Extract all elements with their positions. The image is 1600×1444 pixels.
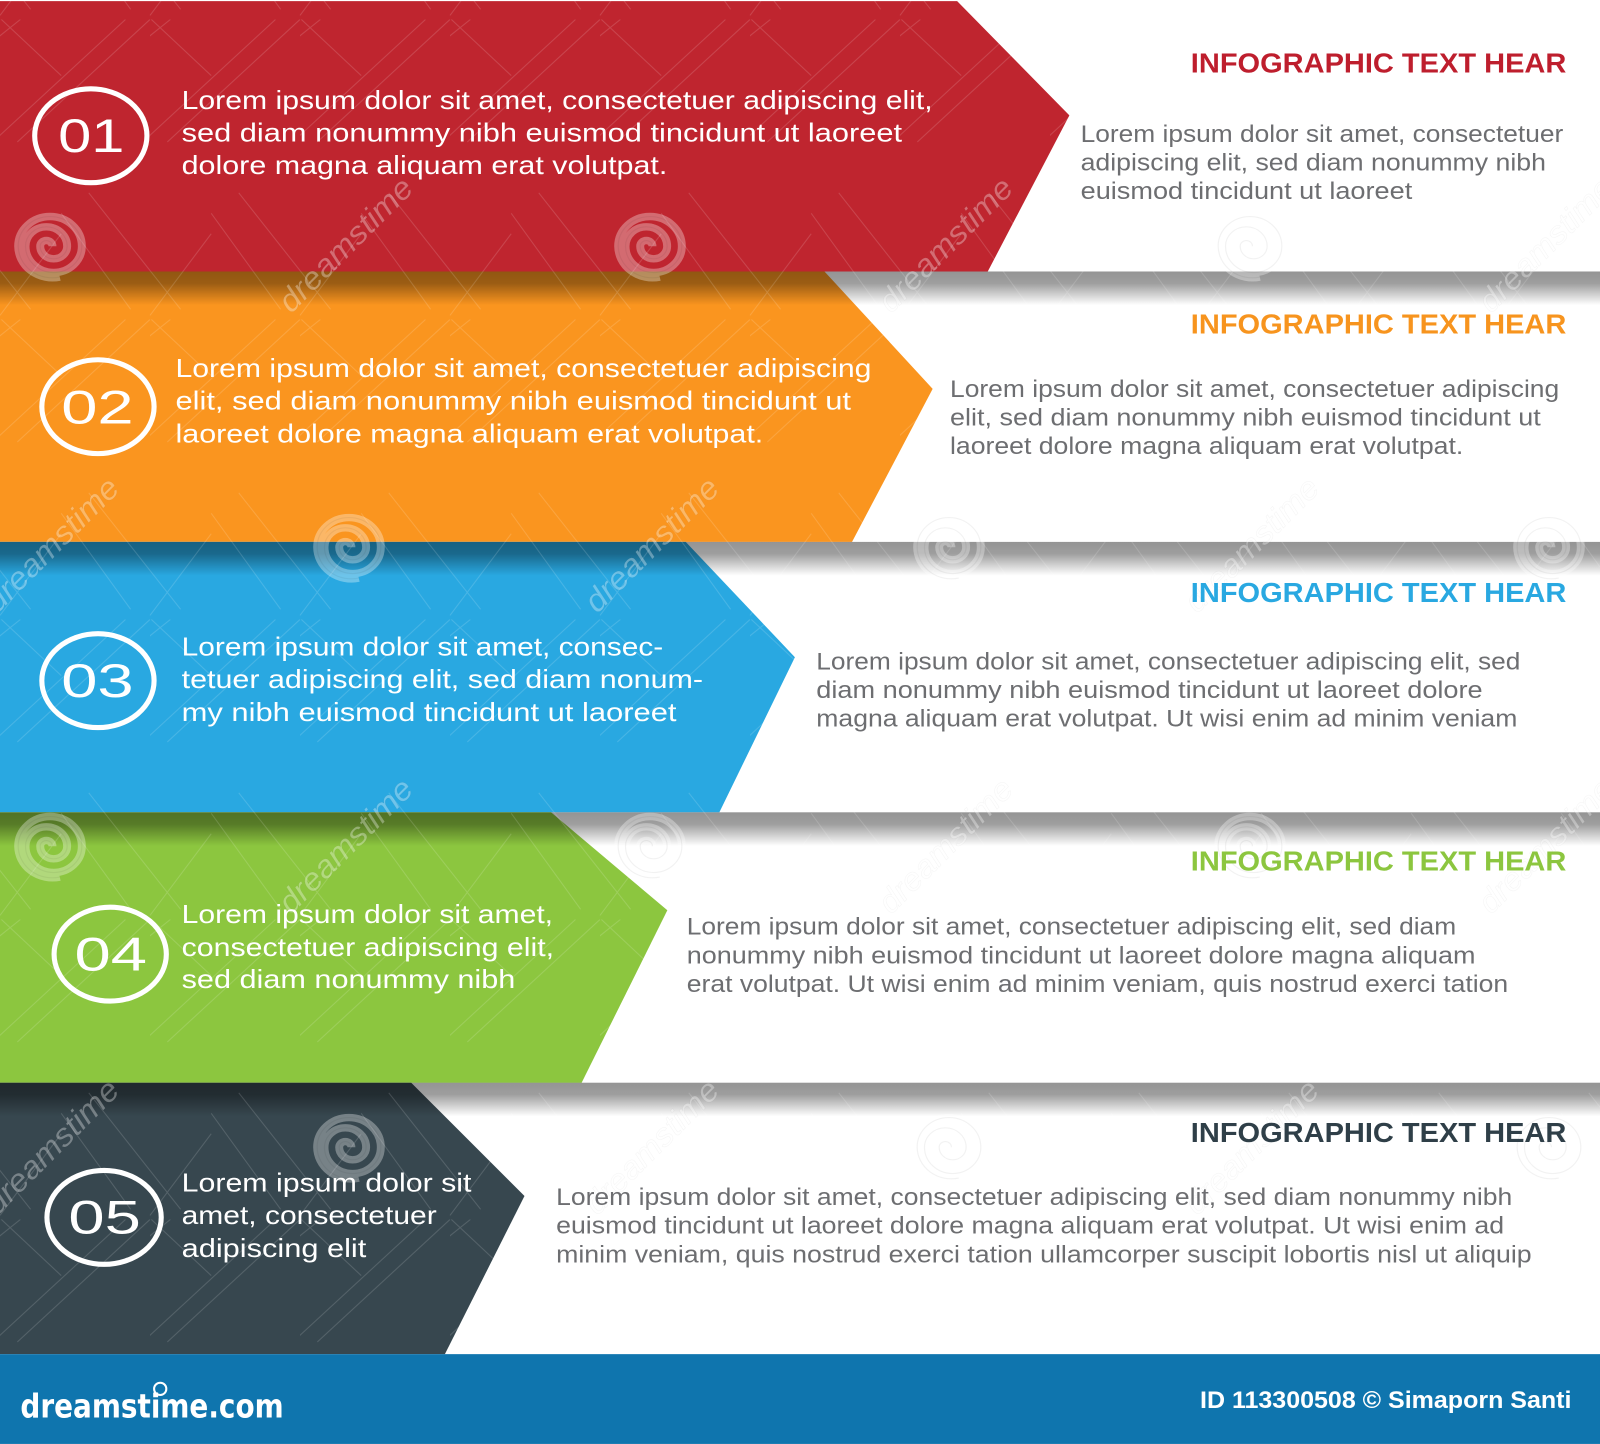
step 04 text: consectetuer adipiscing elit,: [182, 934, 554, 962]
step 05 badge: 05: [68, 1192, 141, 1244]
step 05 heading: INFOGRAPHIC TEXT HEAR: [1191, 1117, 1566, 1148]
step 01 badge: [35, 89, 147, 183]
step 02 badge: 02: [61, 382, 134, 434]
watermark: diagonal text: dreamstime: [1177, 1072, 1326, 1221]
step 04 description: Lorem ipsum dolor sit amet, consectetuer adipiscing elit, sed diam: [687, 914, 1456, 941]
step 04 description: nonummy nibh euismod tincidunt ut laoreet dolore magna aliquam: [687, 942, 1476, 969]
step 02 text: Lorem ipsum dolor sit amet, consectetuer adipiscing: [176, 355, 871, 383]
step 05 text: amet, consectetuer: [182, 1202, 437, 1230]
step 03 description: [816, 648, 1520, 733]
step 02 text: [176, 355, 871, 448]
watermark: diagonal text: dreamstime: [271, 170, 420, 319]
band shadows: [0, 271, 1600, 1116]
step 02 heading: INFOGRAPHIC TEXT HEAR: [1191, 309, 1566, 340]
step 04 heading: INFOGRAPHIC TEXT HEAR: [1191, 845, 1566, 876]
watermark: diagonal text: dreamstime: [577, 1072, 726, 1221]
watermark: diagonal text: dreamstime: [1177, 470, 1326, 619]
step 04 text: sed diam nonummy nibh: [182, 966, 515, 994]
step 05 description: Lorem ipsum dolor sit amet, consectetuer adipiscing elit, sed diam nonummy nibh: [556, 1184, 1512, 1211]
step 05 text: [182, 1169, 471, 1263]
step 03 description: diam nonummy nibh euismod tincidunt ut laoreet dolore: [816, 677, 1483, 704]
step 02 badge: [42, 360, 154, 454]
step 05 description: euismod tincidunt ut laoreet dolore magna aliquam erat volutpat. Ut wisi enim ad: [556, 1213, 1504, 1240]
footer bar: [0, 1354, 1600, 1444]
step 04 text: Lorem ipsum dolor sit amet,: [182, 901, 553, 929]
step 01 text: dolore magna aliquam erat volutpat.: [182, 152, 667, 180]
watermark: diagonal text: [0, 170, 1600, 1221]
step 04 badge: 04: [74, 928, 147, 980]
step 01 description: euismod tincidunt ut laoreet: [1081, 178, 1412, 205]
step 01 badge: 01: [58, 110, 124, 162]
step 04 badge: [54, 907, 166, 1001]
step 05 badge: [47, 1170, 161, 1264]
watermark: diagonal text: dreamstime: [271, 771, 420, 920]
footer credit: ID 113300508 © Simaporn Santi: [1200, 1387, 1571, 1414]
step 01 text: Lorem ipsum dolor sit amet, consectetuer adipiscing elit,: [182, 87, 933, 115]
step 03 text: tetuer adipiscing elit, sed diam nonum-: [182, 666, 703, 694]
step 01 text: [182, 87, 933, 180]
step 03 text: Lorem ipsum dolor sit amet, consec-: [182, 634, 663, 662]
step 01 heading: INFOGRAPHIC TEXT HEAR: [1191, 48, 1566, 79]
step 03 text: my nibh euismod tincidunt ut laoreet: [182, 699, 677, 727]
panel 05: dark arrow: [0, 1083, 524, 1354]
footer logo: dreamstime.com: [20, 1387, 284, 1425]
watermark: diagonal text: dreamstime: [577, 470, 726, 619]
step 05 text: adipiscing elit: [182, 1235, 366, 1263]
panel 03: blue arrow: [0, 542, 795, 812]
step 04 description: erat volutpat. Ut wisi enim ad minim veniam, quis nostrud exerci tation: [687, 971, 1508, 998]
step 03 description: Lorem ipsum dolor sit amet, consectetuer adipiscing elit, sed: [816, 648, 1520, 675]
step 05 description: minim veniam, quis nostrud exerci tation ullamcorper suscipit lobortis nisl ut aliquip: [556, 1241, 1532, 1268]
step 02 description: laoreet dolore magna aliquam erat volutpat.: [950, 433, 1463, 460]
step 02 text: elit, sed diam nonummy nibh euismod tincidunt ut: [176, 388, 851, 416]
step 03 badge: 03: [61, 655, 134, 707]
watermark: diagonal text: dreamstime: [871, 170, 1020, 319]
step 04 text: [182, 901, 554, 994]
step 02 description: [950, 376, 1559, 460]
step 03 badge: [42, 634, 154, 728]
panel 04: green arrow: [0, 812, 667, 1083]
step 03 heading: INFOGRAPHIC TEXT HEAR: [1191, 577, 1566, 608]
step 01 text: sed diam nonummy nibh euismod tincidunt ut laoreet: [182, 119, 902, 147]
step 02 text: laoreet dolore magna aliquam erat volutpat.: [176, 420, 763, 448]
watermark: spirals: [18, 217, 1581, 1179]
step 03 text: [182, 634, 703, 727]
step 05 text: Lorem ipsum dolor sit: [182, 1169, 471, 1197]
step 05 description: [556, 1184, 1532, 1268]
panel 02: orange arrow: [0, 271, 933, 542]
step 01 description: Lorem ipsum dolor sit amet, consectetuer: [1081, 121, 1563, 148]
panel 01: red arrow: [0, 1, 1069, 271]
step 02 description: elit, sed diam nonummy nibh euismod tincidunt ut: [950, 405, 1541, 432]
step 03 description: magna aliquam erat volutpat. Ut wisi enim ad minim veniam: [816, 706, 1517, 733]
step 01 description: adipiscing elit, sed diam nonummy nibh: [1081, 149, 1546, 176]
step 01 description: [1081, 121, 1563, 205]
watermark: diagonal text: dreamstime: [871, 771, 1020, 920]
step 04 description: [687, 914, 1508, 998]
step 02 description: Lorem ipsum dolor sit amet, consectetuer adipiscing: [950, 376, 1559, 403]
